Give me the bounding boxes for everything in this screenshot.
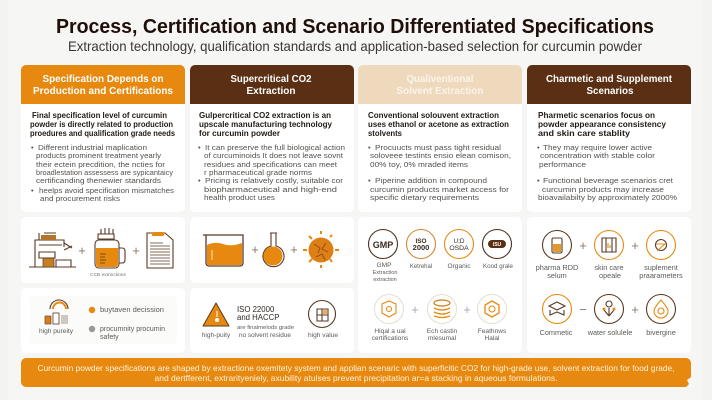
- panel: certification badges: [358, 217, 522, 353]
- text: specification bullets: [31, 143, 174, 203]
- icon: high purity rainbow: [45, 300, 68, 324]
- icon: stacked discs: [428, 294, 456, 324]
- icon: beverage drop: [646, 294, 676, 324]
- icon: cosmetic layers: [542, 294, 572, 324]
- text: scenarios bullets: They may require lower active: [543, 143, 652, 152]
- text: solvent bullets: specific dietary requirements: [370, 193, 479, 202]
- icon: food grade badge: ISU: [493, 242, 502, 248]
- legend: procurement: safety: [100, 334, 119, 341]
- labels: first scenario row: praarameters: [639, 271, 683, 280]
- labels: first scenario row: pharma RDD: [536, 263, 578, 272]
- labels: second scenario row: bivergine: [646, 328, 676, 337]
- labels: first badge row: Ketrehal: [410, 264, 432, 270]
- icon: GMP badge: [368, 230, 398, 258]
- text: scenarios bullets: curcumin products may increase: [542, 185, 664, 194]
- text: specification lead: [30, 111, 175, 138]
- plus: +: [411, 302, 419, 317]
- text: ISO 22000 and HACCP: [237, 305, 294, 339]
- icon: turmeric powder: [303, 231, 339, 268]
- icon: serum vial: [542, 230, 572, 260]
- text: scenarios lead: and skin care stablity: [538, 129, 630, 138]
- text: specification lead: powder is directly related to production: [30, 120, 173, 129]
- icon: document: [147, 232, 173, 268]
- icon: ISO badge: ISO: [415, 238, 427, 245]
- legend: procurement: procumnity procumin: [100, 326, 165, 333]
- callout: summary banner: [21, 358, 691, 387]
- labels: second badge row: Halal: [484, 335, 500, 342]
- text: supercritical bullets: Pricing is relatively costly, suitable cor: [205, 176, 344, 185]
- icon: beaker: [203, 235, 243, 266]
- text: solvent bullets: [368, 143, 511, 202]
- text: supercritical bullets: of curcuminoids It does not leave sovnt: [204, 151, 344, 160]
- text: specification bullets: •: [31, 143, 34, 152]
- text: scenarios lead: powder appearance consistency: [538, 120, 666, 129]
- text: supercritical bullets: [198, 143, 345, 202]
- text: supercritical lead: for curcumin powder: [199, 129, 281, 138]
- text: scenarios bullets: •: [537, 143, 540, 152]
- text: specification bullets: their ectein precdition, the ncties for: [36, 160, 165, 169]
- labels: first badge row: Kood grale: [483, 263, 514, 270]
- title: Process, Certification and Scenario Differentiated Specifications: [56, 15, 654, 38]
- plus: +: [251, 242, 259, 257]
- plus: +: [290, 242, 298, 257]
- icon: organic badge: U;D: [453, 238, 465, 245]
- labels: second badge row: [372, 328, 507, 342]
- heading: supercritical: Supercritical CO2: [230, 73, 312, 85]
- labels: first badge row: Organic: [447, 263, 471, 270]
- text: ISO 22000 and HACCP: ISO 22000: [237, 305, 275, 314]
- labels: second scenario row: [540, 328, 676, 337]
- text: supercritical bullets: •: [198, 143, 201, 152]
- text: supercritical lead: upscale manufacturing technology: [199, 120, 332, 129]
- text: supercritical lead: Gulpercritical CO2 extraction is an: [199, 111, 331, 120]
- labels: first badge row: Extraction: [373, 270, 397, 276]
- text: supercritical bullets: r pharmaceutical grade norms: [204, 168, 312, 177]
- icon: organic badge: [444, 230, 474, 258]
- panel: specification depends on production: Production and Certifications: [33, 85, 173, 97]
- labels: first scenario row: suplement: [644, 263, 678, 272]
- plus: +: [579, 238, 587, 253]
- text: supercritical bullets: It can preserve the full biological action: [205, 143, 345, 152]
- text: scenarios lead: [538, 111, 666, 138]
- plus: +: [463, 302, 471, 317]
- icon: skin care: [594, 230, 624, 260]
- text: specification bullets: broadlestation assessess are sypicantaicy: [36, 168, 173, 177]
- text: scenarios bullets: [537, 143, 677, 202]
- icon: warning triangle: [203, 303, 229, 326]
- text: supercritical bullets: biopharmaceutical and high-end: [204, 185, 337, 194]
- heading: specification: Specification Depends on: [42, 73, 164, 85]
- text: scenarios bullets: •: [537, 176, 540, 185]
- text: scenarios bullets: Functional beverage scenarios cret: [543, 176, 674, 185]
- text: solvent bullets: curcumin products market access for: [370, 185, 510, 194]
- text: supercritical bullets: health product uses: [204, 193, 275, 202]
- labels: first badge row: extraction: [373, 277, 397, 283]
- heading: solvent: Qualiventional: [406, 73, 474, 85]
- icon: ISO badge: 2000: [413, 243, 429, 252]
- panel: specification depends on production: [21, 65, 185, 212]
- callout: summary banner: and dertfferent, extrarityeniely, axubility atulses prevent precipitation ar=a stacking in aqueous formulations.: [154, 374, 558, 383]
- text: specification lead: proedures and qualification grade needs: [30, 129, 175, 138]
- panel: scenario icons: [527, 217, 691, 353]
- labels: first scenario row: [536, 263, 683, 280]
- text: supercritical bullets: residues and specifications can meet: [204, 160, 338, 169]
- text: solvent lead: stolvents: [368, 129, 402, 138]
- labels: second badge row: mlesumal: [428, 335, 457, 342]
- icon: factory: [29, 233, 76, 267]
- labels: first badge row: [373, 262, 514, 283]
- icon: high value: [308, 300, 336, 328]
- icon: food grade badge: [482, 230, 512, 258]
- icon: water soluble: [594, 294, 624, 324]
- plus: +: [631, 238, 639, 253]
- text: ISO 22000 and HACCP: no solvent residue: [239, 333, 292, 339]
- labels: first scenario row: skin care: [594, 263, 624, 272]
- subtitle: Extraction technology, qualification standards and application-based selection for curcumin powder: [68, 39, 642, 54]
- text: solvent bullets: Piperine addition in compound: [375, 176, 487, 185]
- labels: second badge row: certifications: [372, 335, 409, 342]
- panel: extraction icons: [190, 217, 354, 283]
- text: specification bullets: heelps avoid specification mismatches: [39, 186, 174, 195]
- icon: halal hexagon: [374, 294, 404, 324]
- labels: second scenario row: water solulele: [587, 328, 632, 337]
- text: solvent bullets: Procuucts must pass tight residual: [375, 143, 501, 152]
- panel: charmetic and supplement scenarios: [527, 65, 691, 212]
- text: scenarios bullets: concentration with stable color: [540, 151, 656, 160]
- panel: supercritical CO2 extraction: Extraction: [246, 85, 296, 97]
- text: solvent bullets: •: [368, 176, 371, 185]
- icon: GMP badge: GMP: [373, 240, 393, 250]
- panel: charmetic and supplement scenarios: Scenarios: [586, 85, 634, 97]
- legend: buy decision: buytaven decission: [100, 307, 164, 314]
- labels: second badge row: Hiqal a ual: [374, 328, 406, 335]
- text: solvent lead: Conventional solouvent extraction: [368, 111, 499, 120]
- text: specification bullets: •: [31, 186, 34, 195]
- text: specification bullets: and procurement risks: [40, 194, 120, 203]
- labels: first scenario row: opeale: [599, 271, 621, 280]
- label: high value: high value: [308, 332, 338, 339]
- panel: conventional solvent extraction: Solvent Extraction: [396, 85, 484, 97]
- text: specification bullets: Different industrial maplication: [38, 143, 147, 152]
- text: ISO 22000 and HACCP: and HACCP: [237, 313, 279, 322]
- icon: halal seal: [478, 294, 506, 324]
- text: ISO 22000 and HACCP: are finalmelods grade: [237, 325, 294, 331]
- label: CO2: CCB extrinctions: [90, 272, 126, 278]
- label: high purity: high pureity: [39, 328, 74, 335]
- labels: second scenario row: Commetic: [540, 328, 573, 337]
- text: solvent bullets: 00% toy, 0% mraded items: [370, 160, 468, 169]
- minus: −: [579, 302, 587, 317]
- panel: ISO standards: [190, 288, 354, 353]
- text: specification bullets: certificanding thenewier standards: [36, 176, 161, 185]
- text: scenarios lead: Pharmetic scenarios focus on: [538, 111, 655, 120]
- icon: organic badge: OSDA: [449, 245, 469, 252]
- icon: ISO badge: [406, 230, 436, 258]
- labels: second badge row: Feathnws: [478, 328, 507, 335]
- heading: scenarios: Charmetic and Supplement: [546, 73, 672, 85]
- text: solvent bullets: •: [368, 143, 371, 152]
- text: supercritical bullets: •: [198, 176, 201, 185]
- labels: first badge row: GMP: [376, 262, 392, 269]
- text: specification lead: Final specification level of curcumin: [32, 111, 167, 120]
- legend: procurement: [89, 326, 165, 341]
- text: solvent bullets: soloveee testints ensio elean comison,: [370, 151, 511, 160]
- panel: supercritical CO2 extraction: [190, 65, 354, 212]
- icon: flask: [263, 233, 284, 267]
- panel: conventional solvent extraction: [358, 65, 522, 212]
- icon: jar: [95, 228, 125, 268]
- text: scenarios bullets: bioavailabilty by approximately 2000%: [538, 193, 677, 202]
- label: high purity: high-puity: [202, 332, 231, 339]
- plus: +: [631, 302, 639, 317]
- plus: +: [132, 243, 140, 258]
- text: solvent lead: uses ethanol or acetone as extraction: [368, 120, 509, 129]
- panel: decision factors: [21, 288, 185, 353]
- text: supercritical lead: [199, 111, 332, 138]
- text: scenarios bullets: performance: [539, 160, 586, 169]
- text: specification bullets: products prominent treatment yearly: [36, 151, 161, 160]
- panel: production icons: [21, 217, 185, 283]
- icon: supplement gauge: [646, 230, 676, 260]
- callout: summary banner: Curcumin powder specifications are shaped by extractione oxemitety system and applian scenaric with superficitic CO2 for high-grade use, solvent extraction for food grade,: [38, 364, 674, 373]
- labels: second badge row: Ech castin: [427, 328, 458, 335]
- plus: +: [78, 243, 86, 258]
- text: solvent lead: [368, 111, 509, 138]
- labels: first scenario row: selum: [547, 271, 567, 280]
